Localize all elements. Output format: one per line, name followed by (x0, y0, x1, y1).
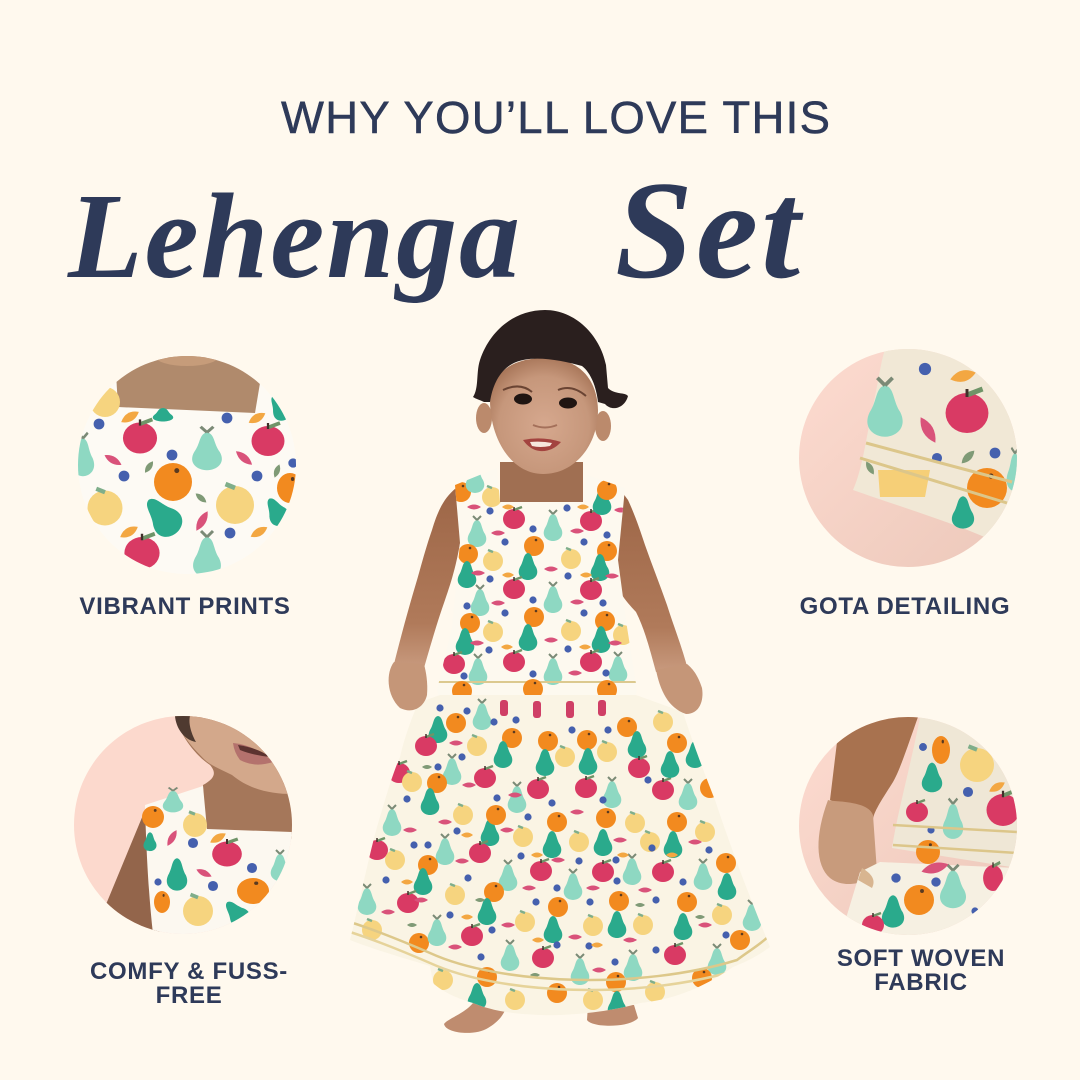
label: soft woven fabric: FABRIC (874, 969, 968, 996)
label: gota detailing: GOTA DETAILING (800, 593, 1010, 620)
label: soft woven fabric: SOFT WOVEN (837, 945, 1005, 972)
circle: comfy and fuss-free (74, 716, 292, 934)
ears (476, 403, 611, 441)
circle: gota detailing (799, 349, 1023, 567)
label: soft woven fabric (837, 945, 1005, 996)
circle: soft woven fabric (799, 717, 1020, 935)
hands (389, 662, 702, 714)
label: comfy and fuss-free: FREE (156, 982, 222, 1009)
label: comfy and fuss-free: COMFY & FUSS- (90, 958, 288, 985)
hair (473, 310, 628, 408)
face (490, 358, 598, 474)
label: vibrant prints: VIBRANT PRINTS (79, 593, 291, 620)
title: Lehenga Set: Set (615, 153, 804, 308)
photo: smiling toddler in fruit print lehenga set (340, 310, 780, 1033)
title: Lehenga Set (67, 153, 804, 308)
neck (500, 462, 583, 510)
arms (394, 488, 688, 672)
circle: vibrant prints (78, 356, 296, 574)
feet (444, 998, 638, 1033)
eyes and smile (503, 386, 586, 451)
blouse (438, 474, 636, 695)
heading: why you'll love this: WHY YOU’LL LOVE THIS (281, 92, 831, 143)
title: Lehenga Set: Lehenga (67, 169, 520, 304)
label: comfy and fuss-free (90, 958, 288, 1009)
lehenga skirt (350, 695, 770, 1015)
